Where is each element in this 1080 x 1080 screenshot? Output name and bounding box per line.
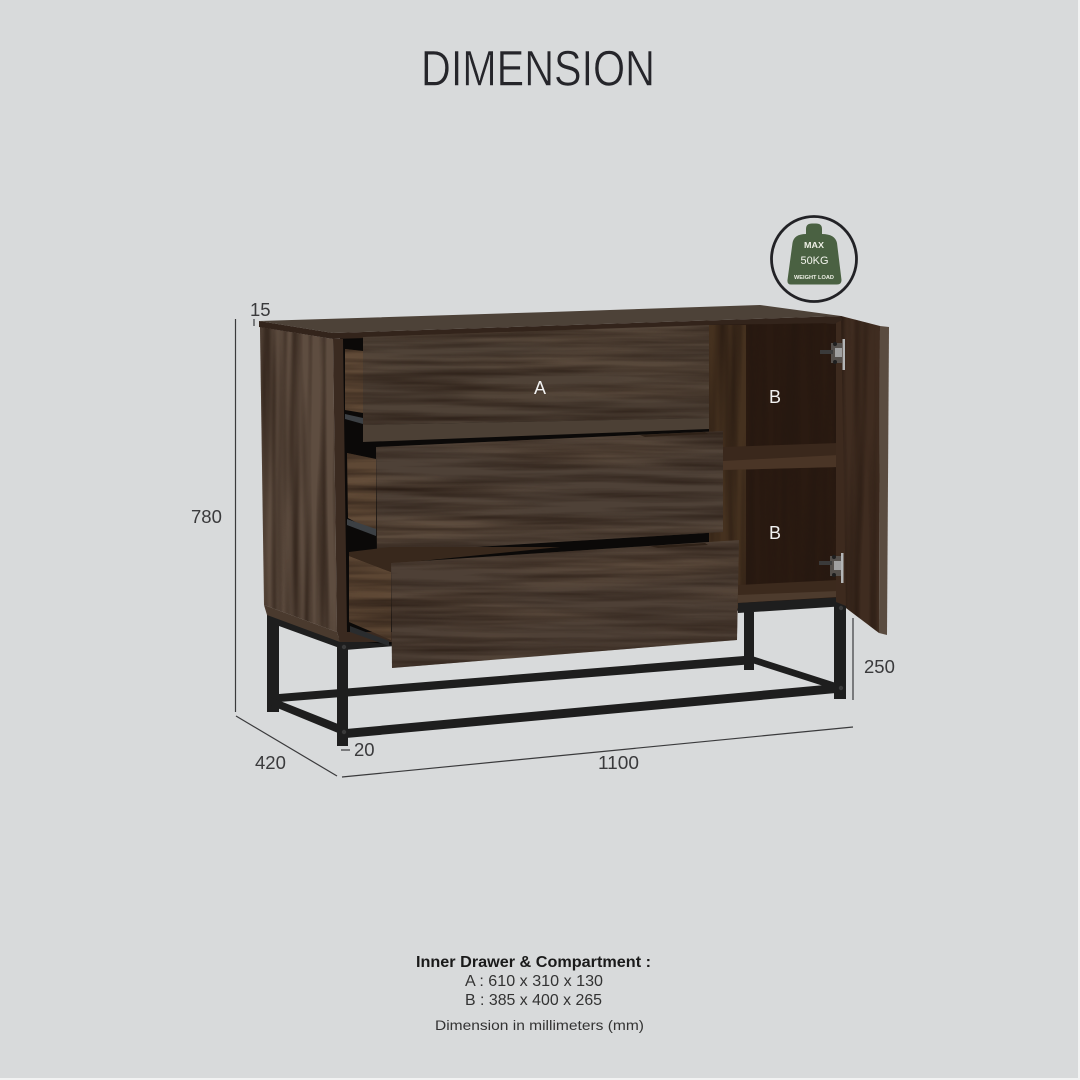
compartment left wall (709, 325, 746, 610)
drawer 2 front (376, 431, 723, 553)
icon: weight load badge: 50KG (800, 255, 828, 267)
left side panel (260, 327, 337, 632)
metal base frame (267, 612, 836, 738)
drawer 2 side (347, 453, 376, 533)
dimension values (191, 299, 895, 773)
metal under compartment (738, 597, 846, 613)
icon: weight load badge (772, 216, 856, 302)
interior shadow (340, 325, 745, 645)
note heading: Inner Drawer & Compartment : (416, 954, 651, 971)
compartment B size: B : 385 x 400 x 265 (465, 992, 602, 1009)
top front edge (259, 316, 841, 339)
drawer 1 side (345, 349, 363, 413)
top front rail (340, 640, 395, 650)
door edge (879, 326, 889, 635)
icon: weight load badge: WEIGHT LOAD (794, 275, 834, 281)
cabinet door (841, 316, 889, 635)
value 420: 420 (255, 752, 286, 773)
drawer 1 (345, 325, 709, 442)
drawer 1 front (363, 325, 709, 425)
side panel lower edge (264, 605, 340, 642)
title: DIMENSION (421, 40, 655, 96)
value 15: 15 (250, 299, 271, 320)
inner dimensions note (416, 954, 651, 1033)
label B upper: B (769, 387, 781, 407)
door inner face (841, 316, 880, 633)
icon: lower hinge (819, 553, 844, 583)
drawer 3 side (349, 556, 391, 640)
icon: upper hinge (820, 339, 845, 370)
value 20: 20 (354, 739, 375, 760)
value 780: 780 (191, 506, 222, 527)
drawer 1 runner (345, 414, 363, 424)
right side rail (752, 656, 836, 690)
left side rail (270, 697, 338, 733)
drawer 3 tray top (349, 547, 560, 572)
drawer 3 handle recess (650, 543, 708, 548)
shelf (723, 443, 839, 470)
top left side rail (267, 612, 345, 650)
dimension lines (236, 319, 853, 777)
drawer A size: A : 610 x 310 x 130 (465, 973, 603, 990)
front rail (346, 684, 836, 738)
label B lower: B (769, 523, 781, 543)
drawer 2 handle recess (640, 432, 708, 437)
front-left leg (337, 643, 348, 746)
drawer 3 runner (350, 626, 389, 646)
front edge of side panel (333, 339, 395, 642)
back rail (279, 656, 754, 702)
front legs (337, 606, 846, 746)
drawer 3 (349, 540, 739, 668)
compartment back (709, 323, 841, 610)
front-right leg (834, 606, 846, 699)
back-right leg (744, 612, 754, 670)
top surface (259, 305, 841, 333)
drawer 2 runner (347, 519, 376, 536)
drawer 2 (347, 431, 723, 553)
compartment floor (738, 580, 838, 602)
drawer 3 front (391, 540, 739, 668)
drawer 1 lip (363, 418, 709, 442)
cabinet (259, 305, 846, 645)
icon: weight load badge: MAX (804, 241, 825, 250)
label A: A (534, 378, 546, 398)
units note: Dimension in millimeters (mm) (435, 1018, 644, 1033)
value 1100: 1100 (598, 752, 639, 773)
compartment right post (836, 318, 846, 606)
compartment labels (534, 378, 781, 543)
value 250: 250 (864, 656, 895, 677)
back-left leg (267, 615, 279, 712)
